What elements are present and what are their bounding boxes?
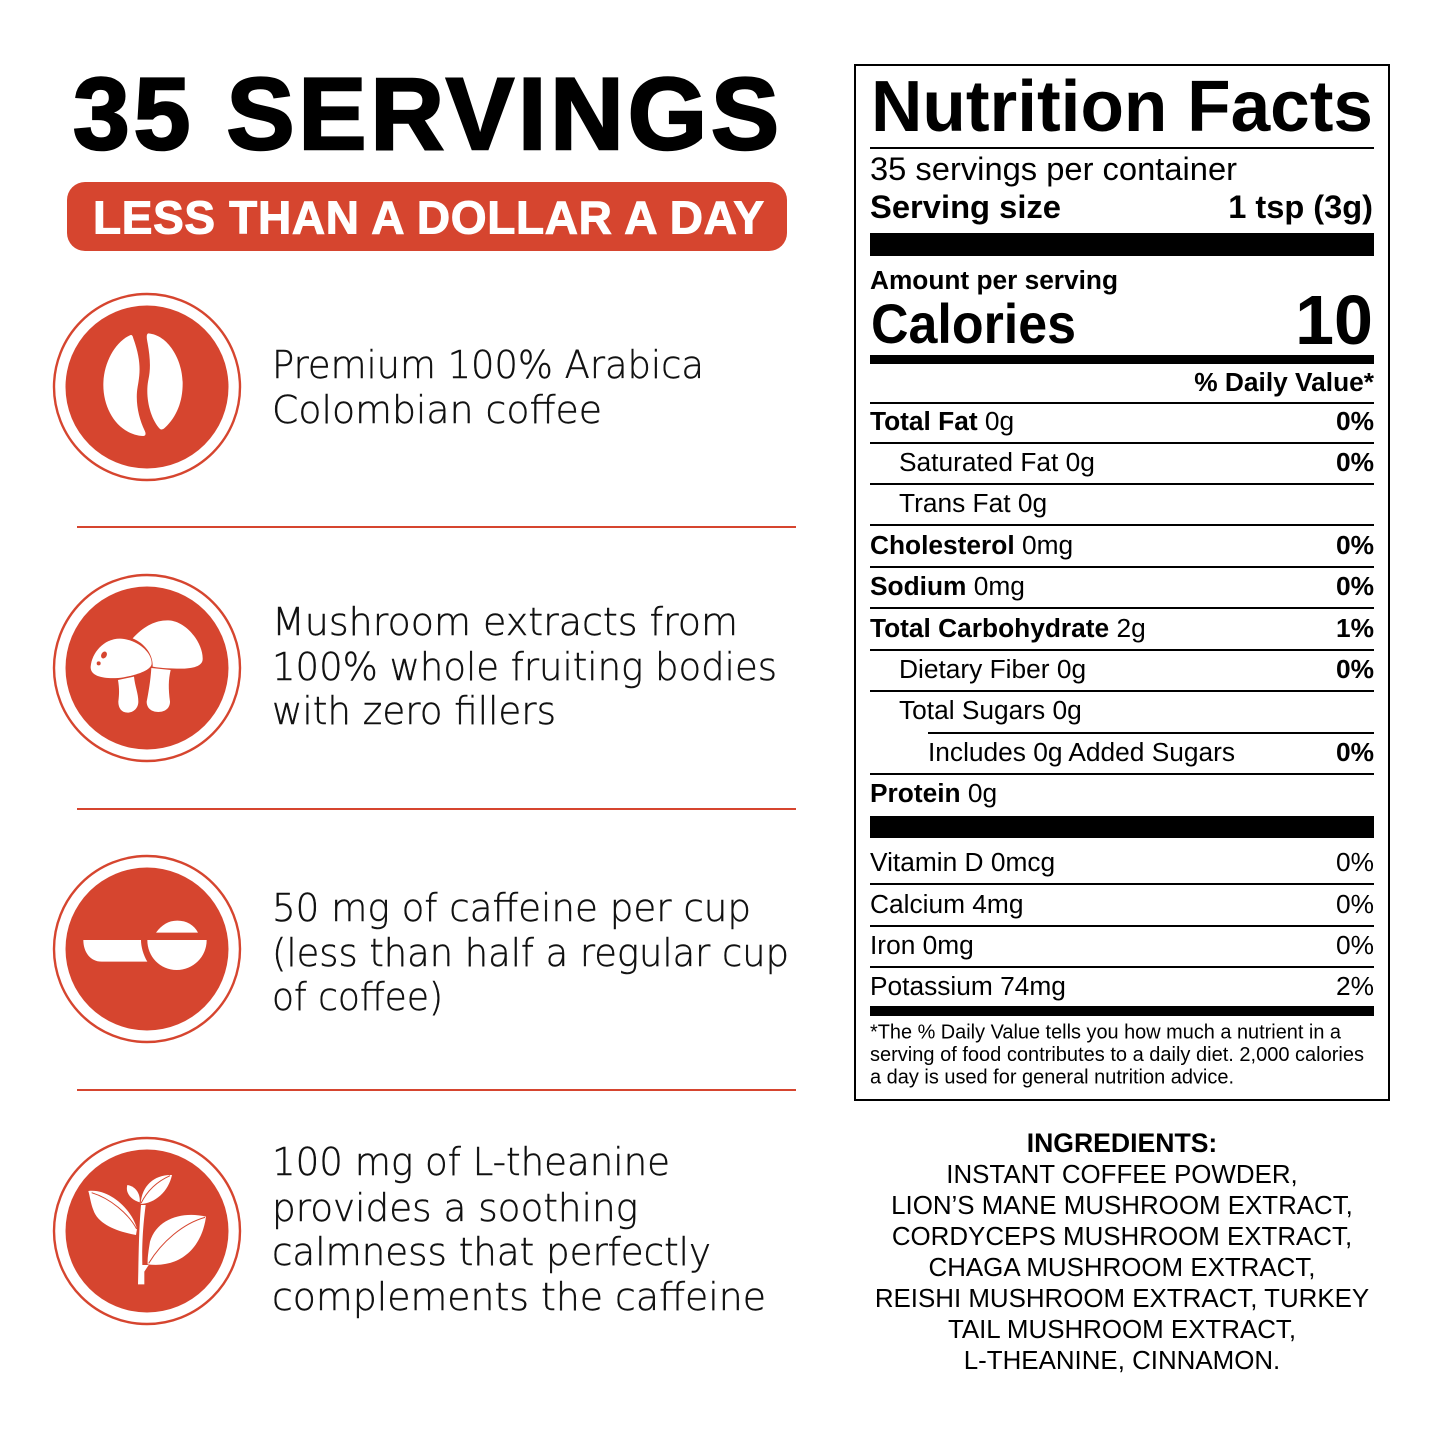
text: mushroom extracts: 100% whole fruiting bodies	[272, 645, 777, 689]
nutrient rows: Cholesterol 0mg	[870, 530, 1073, 560]
heading: nutrition facts: Nutrition Facts	[871, 67, 1373, 147]
text: mushroom extracts: with zero fillers	[272, 689, 556, 733]
nutrient rows: 0%	[1336, 406, 1374, 436]
panel: nutrition facts	[855, 65, 1389, 1100]
nutrient rows: 1%	[1336, 613, 1374, 643]
text: arabica coffee	[272, 343, 704, 432]
panel: features	[54, 294, 796, 1324]
title: 35 SERVINGS	[73, 57, 779, 171]
nutrient rows: 0%	[1336, 737, 1374, 767]
text: caffeine: of coffee)	[272, 975, 443, 1019]
text: l-theanine: provides a soothing	[272, 1186, 638, 1230]
text: l-theanine	[272, 1140, 766, 1319]
vitamins and minerals: 0%	[1336, 847, 1374, 877]
nutrient rows: Protein 0g	[870, 778, 997, 808]
calories: Calories	[871, 292, 1076, 355]
icon: scoop	[54, 856, 240, 1042]
vitamins and minerals: Vitamin D 0mcg	[870, 847, 1055, 877]
text: l-theanine: 100 mg of L-theanine	[272, 1140, 670, 1184]
icon: tea sprig	[54, 1138, 240, 1324]
badge: less than a dollar a day: LESS THAN A DOLLAR A DAY	[93, 192, 764, 244]
footnote: a day is used for general nutrition advice.	[870, 1066, 1234, 1088]
text: mushroom extracts	[272, 600, 777, 733]
ingredients: LION’S MANE MUSHROOM EXTRACT,	[891, 1192, 1353, 1220]
ingredients: INSTANT COFFEE POWDER,	[946, 1161, 1298, 1189]
text: arabica coffee: Colombian coffee	[272, 388, 602, 432]
nutrient rows: Total Carbohydrate 2g	[870, 613, 1146, 643]
calories	[870, 265, 1373, 359]
ingredients: CORDYCEPS MUSHROOM EXTRACT,	[892, 1223, 1352, 1251]
nutrient rows: 0%	[1336, 571, 1374, 601]
icon: mushrooms	[54, 575, 240, 761]
footnote: *The % Daily Value tells you how much a nutrient in a	[870, 1022, 1342, 1044]
feature: arabica coffee	[54, 294, 704, 480]
servings: 35 servings per container	[870, 151, 1237, 187]
text: caffeine	[272, 886, 789, 1019]
vitamins and minerals: Iron 0mg	[870, 930, 974, 960]
servings: Serving size	[870, 189, 1061, 225]
vitamins and minerals: 0%	[1336, 889, 1374, 919]
calories: Amount per serving	[870, 265, 1118, 295]
nutrient rows: 0%	[1336, 447, 1374, 477]
icon: coffee bean	[54, 294, 240, 480]
ingredients: INGREDIENTS:	[1027, 1128, 1217, 1158]
nutrient rows	[870, 406, 1374, 808]
nutrient rows: Total Fat 0g	[870, 406, 1014, 436]
servings: 1 tsp (3g)	[1228, 188, 1373, 225]
feature: l-theanine	[54, 1138, 766, 1324]
nutrient rows: 0%	[1336, 530, 1374, 560]
text: caffeine: (less than half a regular cup	[272, 931, 789, 975]
text: caffeine: 50 mg of caffeine per cup	[272, 886, 751, 930]
vitamins and minerals: Potassium 74mg	[870, 971, 1066, 1001]
ingredients: REISHI MUSHROOM EXTRACT, TURKEY	[875, 1285, 1369, 1313]
text: arabica coffee: Premium 100% Arabica	[272, 343, 704, 387]
ingredients	[875, 1128, 1369, 1375]
nutrient rows: 0%	[1336, 654, 1374, 684]
ingredients: CHAGA MUSHROOM EXTRACT,	[929, 1254, 1315, 1282]
vitamins and minerals	[870, 847, 1374, 1001]
text: l-theanine: calmness that perfectly	[272, 1230, 711, 1274]
servings	[870, 151, 1373, 225]
nutrient rows: Trans Fat 0g	[899, 488, 1047, 518]
nutrient rows: Dietary Fiber 0g	[899, 654, 1086, 684]
ingredients: L-THEANINE, CINNAMON.	[964, 1347, 1280, 1375]
calories: 10	[1295, 281, 1373, 359]
feature: caffeine	[54, 856, 789, 1042]
footnote: serving of food contributes to a daily diet. 2,000 calories	[870, 1044, 1364, 1066]
vitamins and minerals: 2%	[1336, 971, 1374, 1001]
feature: mushroom extracts	[54, 575, 777, 761]
ingredients: TAIL MUSHROOM EXTRACT,	[948, 1316, 1296, 1344]
text: mushroom extracts: Mushroom extracts from	[272, 600, 738, 644]
vitamins and minerals: Calcium 4mg	[870, 889, 1023, 919]
footnote	[870, 1022, 1364, 1088]
nutrient rows: Includes 0g Added Sugars	[928, 737, 1235, 767]
daily value header: % Daily Value*	[1194, 367, 1375, 397]
nutrient rows: Saturated Fat 0g	[899, 447, 1095, 477]
nutrient rows: Sodium 0mg	[870, 571, 1025, 601]
nutrient rows: Total Sugars 0g	[899, 695, 1082, 725]
text: l-theanine: complements the caffeine	[272, 1275, 766, 1319]
vitamins and minerals: 0%	[1336, 930, 1374, 960]
